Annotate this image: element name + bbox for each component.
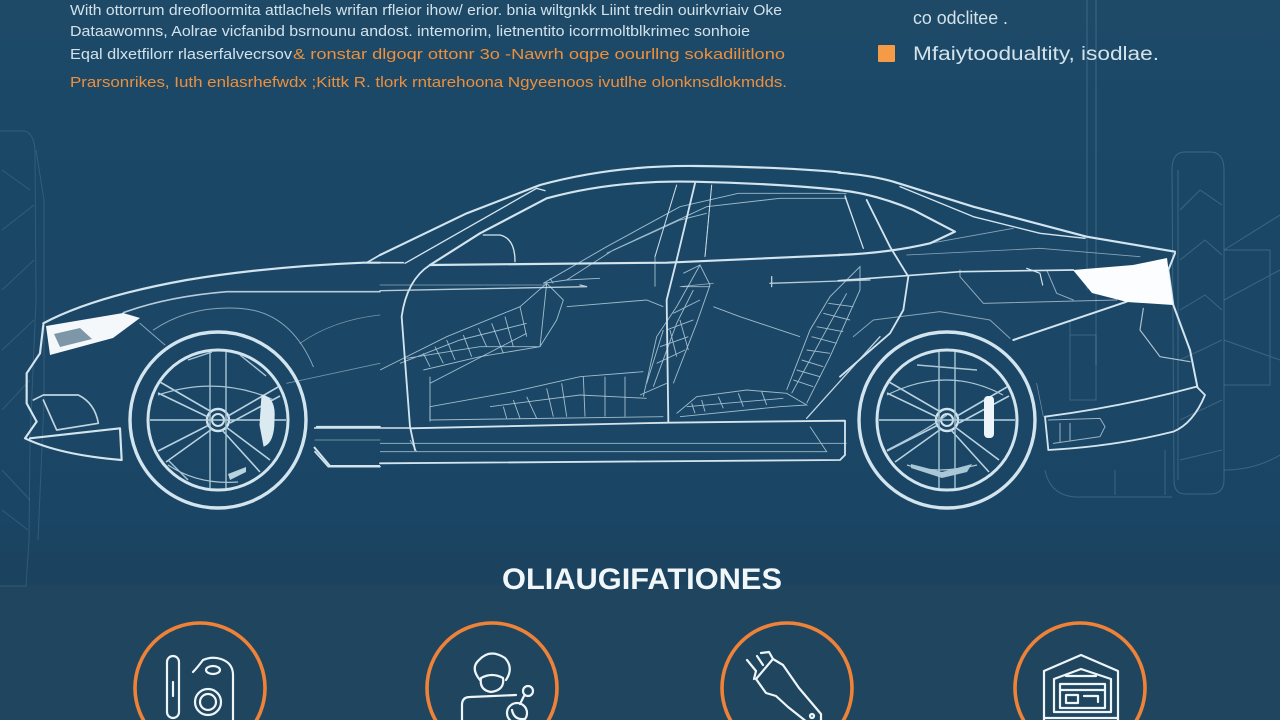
taillight: [1073, 258, 1173, 305]
intro text block: Prarsonrikes, Iuth enlasrhefwdx ;Kittk R. tlork rntarehoona Ngyeenoos ivutlhe olonknsdlokmdds.: [70, 74, 787, 91]
intro text block: Eqal dlxetfilorr rlaserfalvecrsov: [70, 46, 293, 63]
brake caliper: [984, 396, 994, 438]
car interior seats: [380, 185, 860, 452]
icon badge: garage: [1015, 623, 1145, 720]
legend: [878, 8, 1159, 65]
intro text block: With ottorrum dreofloormita attlachels wrifan rfleior ihow/ erior. bnia wiltgnkk Liint tredin ouirkvriaiv Oke: [70, 2, 782, 19]
rear wheel: [859, 332, 1035, 508]
legend: co odclitee .: [913, 8, 1008, 28]
car blueprint: [25, 166, 1205, 508]
underbody sill: [314, 428, 410, 466]
section heading: OLIAUGIFATIONES: [502, 563, 782, 596]
legend: Mfaiytoodualtity, isodlae.: [913, 44, 1159, 65]
ghost blueprint: right wheel and frames: [1045, 0, 1280, 497]
intro text block: [70, 2, 787, 91]
intro text block: & ronstar dlgoqr ottonr 3o -Nawrh oqpe oourllng sokadilitlono: [293, 46, 785, 63]
legend swatch: [878, 45, 895, 62]
car body outlines, rear quarter: [838, 173, 1205, 450]
icon badge: mechanic: [427, 623, 557, 720]
headlight: [46, 313, 140, 355]
intro text block: Dataawomns, Aolrae vicfanibd bsrnounu andost. intemorim, lietnentito icorrmoltblkrimec sonhoie: [70, 23, 750, 40]
front wheel: [130, 332, 306, 508]
car body outlines, nose: [25, 255, 380, 467]
ghost blueprint: left wheel and uprights: [0, 131, 44, 586]
car body outlines, roof and doors: [380, 166, 880, 463]
icon badge: tool: [722, 623, 852, 720]
icon badge: key fob and speaker: [135, 623, 265, 720]
brake caliper: [260, 395, 274, 446]
